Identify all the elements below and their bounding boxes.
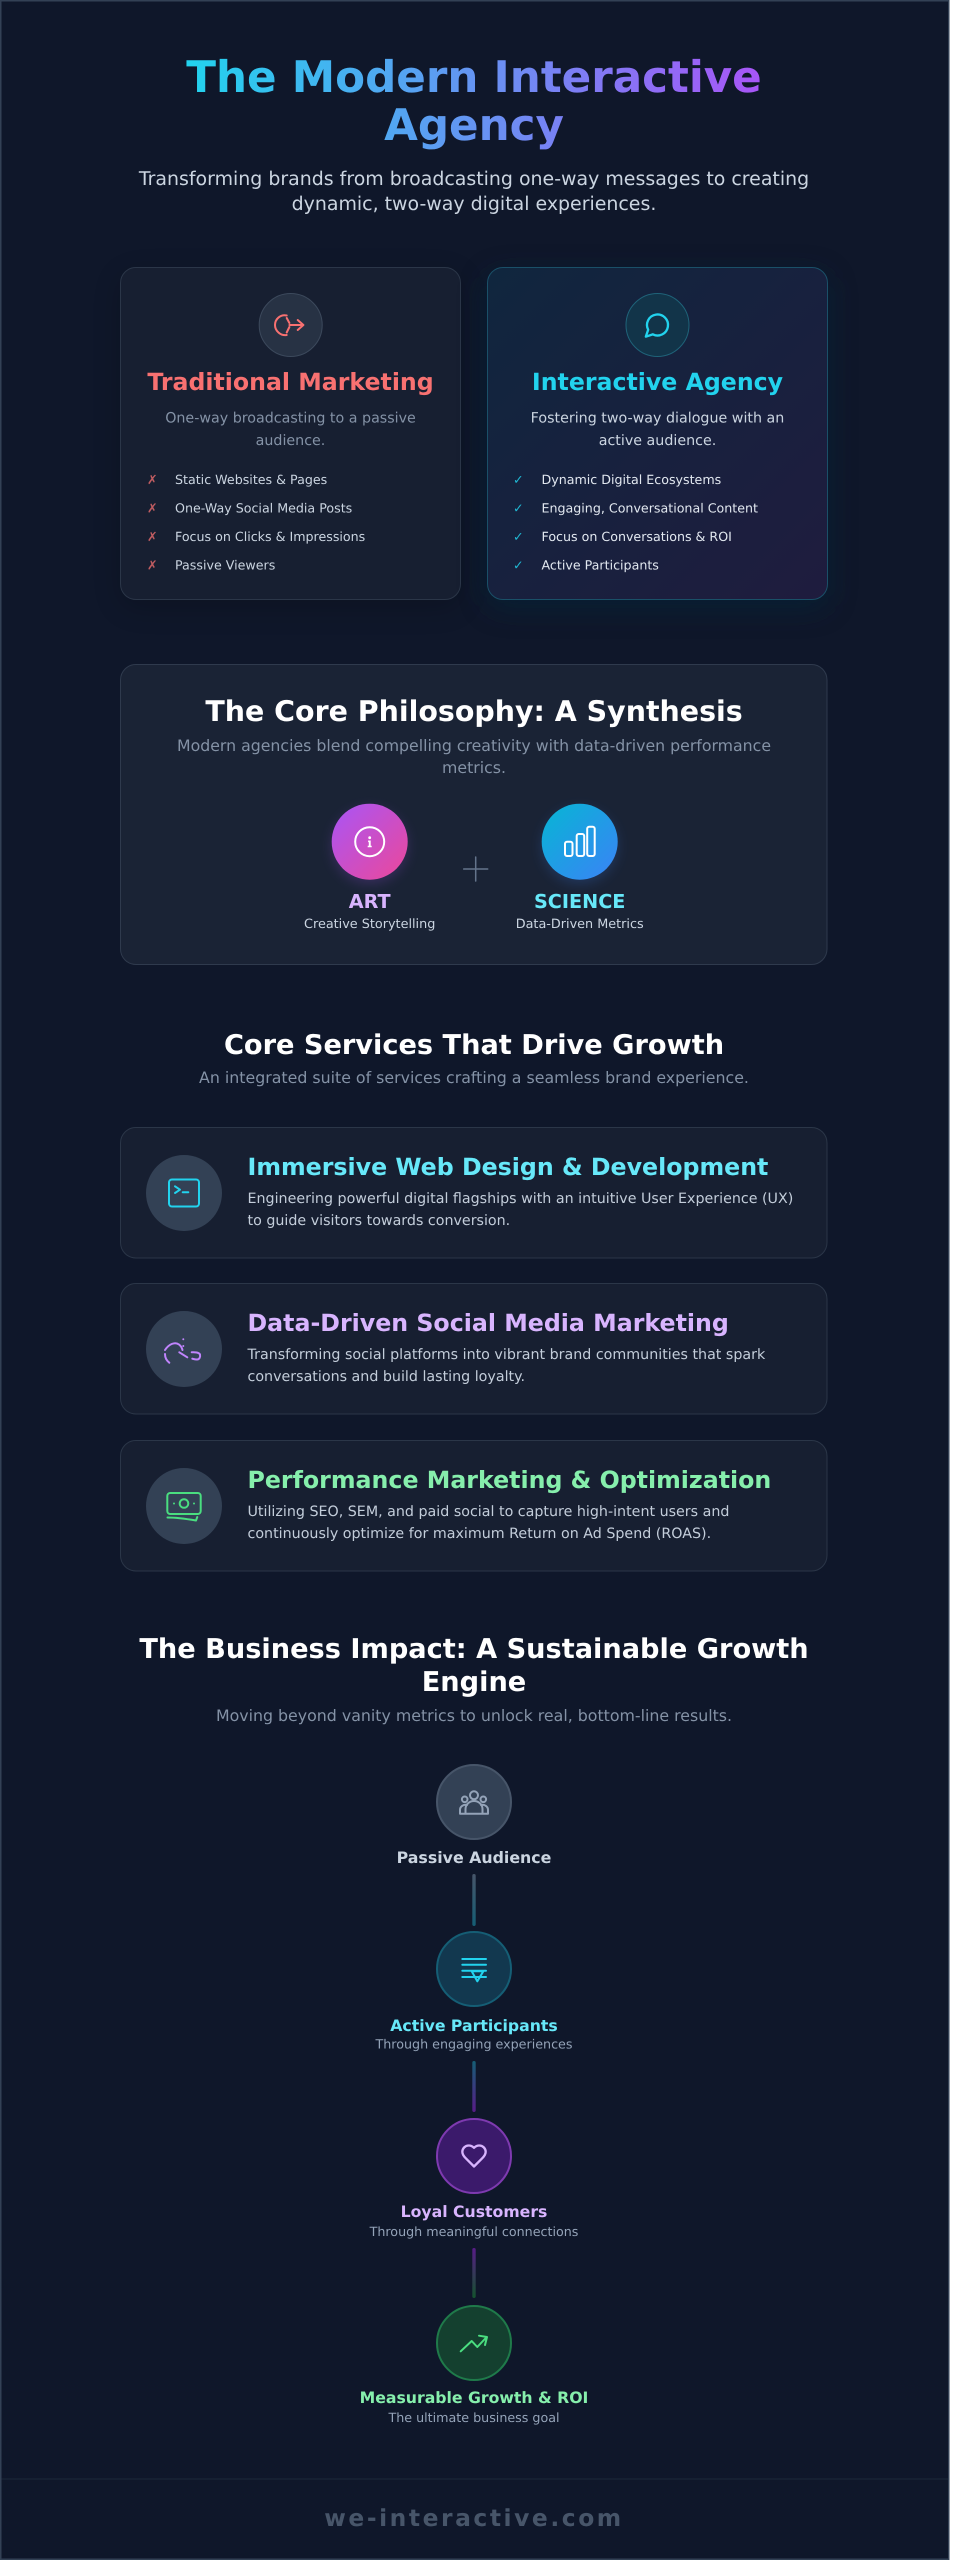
description: traditional: One-way broadcasting to a passive (165, 410, 416, 426)
list: traditional features: ✗ (147, 500, 158, 516)
icon: people (460, 1791, 488, 1814)
flow step: measurable growth: Measurable Growth & ROI (360, 2388, 588, 2407)
flow step: passive audience: Passive Audience (397, 1848, 551, 1867)
panel: interactive agency (487, 268, 828, 608)
science pillar (516, 804, 644, 932)
science pillar: Data-Driven Metrics (516, 917, 644, 932)
science pillar: SCIENCE (534, 890, 625, 913)
description: traditional: audience. (256, 433, 325, 449)
list: traditional features: ✗ (147, 529, 158, 544)
icon: bar chart (565, 827, 595, 856)
heading: interactive agency: Interactive Agency (532, 368, 783, 396)
subtitle: dynamic, two-way digital experiences. (292, 193, 656, 215)
panel: performance service: Utilizing SEO, SEM, and paid social to capture high-intent users and (248, 1504, 729, 1520)
list: traditional features: ✗ (147, 472, 158, 487)
panel: social media service (120, 1284, 827, 1414)
art pillar: Creative Storytelling (304, 917, 435, 932)
flow step: loyal customers (369, 2119, 578, 2239)
list: interactive features: Dynamic Digital Ecosystems (542, 472, 721, 487)
list: interactive features: Engaging, Conversational Content (542, 500, 758, 516)
list: interactive features: Focus on Conversations & ROI (542, 529, 732, 544)
list: interactive features (513, 472, 758, 572)
title: Agency (384, 101, 564, 151)
list: interactive features: ✓ (513, 529, 524, 544)
list: interactive features: Active Participants (542, 558, 659, 572)
panel: core philosophy (120, 664, 827, 964)
flow step: active participants: Active Participants (390, 2016, 558, 2035)
flow step: active participants: Through engaging experiences (375, 2036, 572, 2052)
art pillar: ART (349, 890, 391, 913)
description: core philosophy: Modern agencies blend compelling creativity with data-driven performance (177, 736, 771, 755)
subtitle (138, 168, 809, 215)
icon: info (355, 827, 384, 856)
list: traditional features: Focus on Clicks & Impressions (175, 529, 365, 544)
description: interactive (531, 410, 784, 449)
subheading: core services: An integrated suite of services crafting a seamless brand experience. (199, 1068, 749, 1087)
panel: performance service (120, 1440, 827, 1571)
description: traditional (165, 410, 416, 449)
list: traditional features: Static Websites & Pages (175, 472, 327, 487)
flow step: passive audience (397, 1765, 551, 1867)
subtitle: Transforming brands from broadcasting one-way messages to creating (138, 168, 809, 190)
description: interactive: active audience. (599, 433, 716, 449)
list: interactive features: ✓ (513, 472, 524, 487)
heading: business impact: The Business Impact: A Sustainable Growth (139, 1634, 809, 1665)
panel: traditional marketing (120, 268, 461, 608)
heading: business impact: Engine (422, 1667, 526, 1698)
panel: performance service: continuously optimize for maximum Return on Ad Spend (ROAS). (248, 1526, 711, 1542)
panel: social media service: conversations and build lasting loyalty. (248, 1369, 525, 1385)
list: traditional features: Passive Viewers (175, 558, 275, 572)
panel: web design service: Engineering powerful digital flagships with an intuitive User Experience (UX) (248, 1191, 793, 1207)
description: core philosophy (177, 736, 771, 777)
footer divider (2, 2478, 948, 2480)
description: interactive: Fostering two-way dialogue with an (531, 410, 784, 426)
icon: terminal (146, 1155, 222, 1231)
connector arrow 3 (472, 2248, 476, 2298)
icon: trending up (461, 2336, 487, 2351)
heading: core services: Core Services That Drive Growth (224, 1030, 724, 1061)
list: interactive features: ✓ (513, 558, 524, 572)
panel: social media service: Data-Driven Social Media Marketing (248, 1309, 729, 1337)
list: traditional features (147, 472, 365, 572)
flow step: measurable growth: The ultimate business goal (387, 2410, 560, 2425)
panel: web design service: to guide visitors towards conversion. (248, 1213, 510, 1229)
icon: list funnel (462, 1959, 486, 1981)
list: traditional features: One-Way Social Media Posts (175, 500, 352, 516)
panel: web design service (120, 1128, 827, 1258)
panel: social media service: Transforming social platforms into vibrant brand communities that spark (246, 1347, 766, 1363)
title (186, 53, 762, 151)
icon: chat bubble (626, 294, 689, 356)
panel: performance service: Performance Marketing & Optimization (248, 1466, 771, 1494)
heading: business impact (139, 1634, 809, 1698)
icon: heart (462, 2146, 486, 2167)
flow step: loyal customers: Through meaningful connections (369, 2224, 578, 2239)
heading: traditional marketing: Traditional Marketing (147, 368, 434, 396)
art pillar (304, 804, 435, 932)
list: interactive features: ✓ (513, 500, 524, 516)
list: traditional features: ✗ (147, 558, 158, 572)
heading: core philosophy: The Core Philosophy: A Synthesis (205, 695, 743, 728)
subheading: business impact: Moving beyond vanity metrics to unlock real, bottom-line results. (216, 1706, 732, 1725)
connector arrow 2 (472, 2061, 476, 2112)
connector arrow 1 (472, 1874, 476, 1926)
flow step: loyal customers: Loyal Customers (401, 2202, 547, 2221)
title: The Modern Interactive (186, 53, 762, 103)
description: core philosophy: metrics. (442, 758, 506, 777)
icon: money (146, 1468, 222, 1544)
panel: web design service: Immersive Web Design & Development (248, 1153, 768, 1181)
footer brand: we-interactive.com (324, 2504, 624, 2532)
flow step: measurable growth (360, 2306, 588, 2425)
plus sign (464, 857, 488, 881)
flow step: active participants (375, 1932, 572, 2052)
icon: broadcast arrow (259, 294, 322, 356)
icon: social (146, 1311, 222, 1387)
